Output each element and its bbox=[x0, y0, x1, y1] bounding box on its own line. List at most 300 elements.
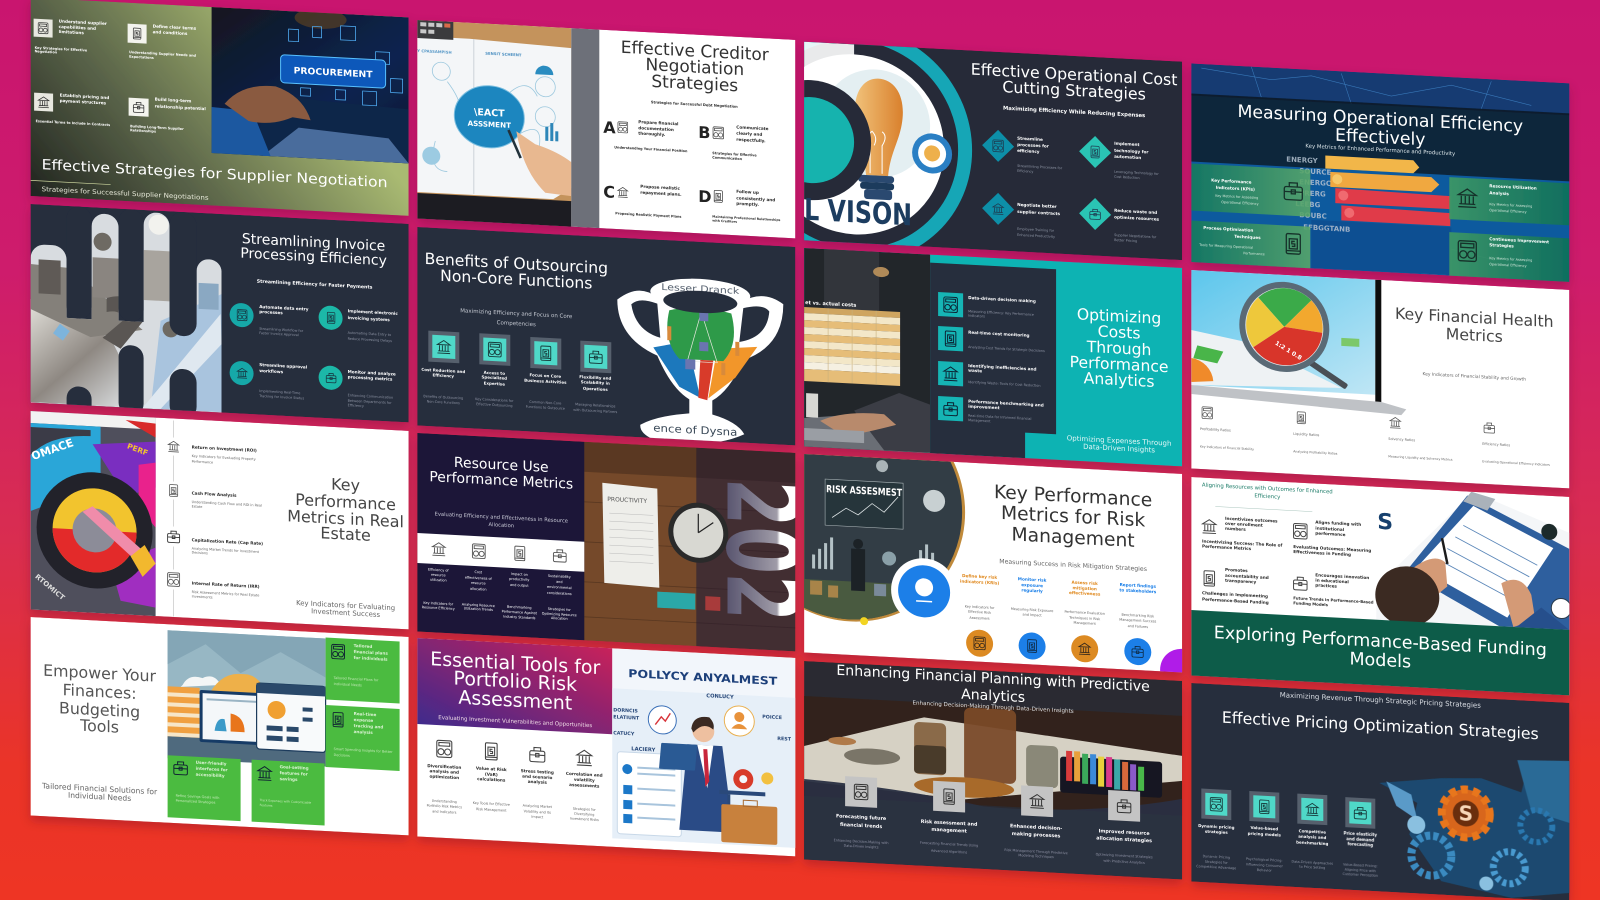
strategy: dynamic: strategies bbox=[1205, 829, 1228, 835]
photo: signing clipboard: S bbox=[1377, 510, 1393, 536]
strategy: dynamic: Competitive Advantage bbox=[1196, 864, 1236, 870]
column: define KRIs: Key Indicators for bbox=[965, 604, 995, 610]
subtitle: Strategies for Successful Debt Negotiation bbox=[651, 100, 738, 109]
risk assessment image bbox=[735, 385, 974, 633]
column: report findings bbox=[1119, 582, 1157, 666]
metric: ROI: Performance bbox=[192, 459, 213, 465]
title: Through bbox=[1086, 338, 1151, 359]
grey divider panel bbox=[571, 28, 599, 228]
strategy: competitive: Data-Driven Approaches bbox=[1292, 860, 1333, 866]
title: Essential Tools for bbox=[430, 648, 601, 679]
tool: correlation: Correlation and bbox=[566, 771, 603, 778]
use: forecasting bbox=[834, 776, 889, 850]
item: streamline: processes for bbox=[1017, 142, 1050, 149]
title: Performance Metrics bbox=[429, 469, 573, 493]
navy panel bbox=[417, 433, 584, 640]
panel: expense tracking: Real-time bbox=[354, 711, 376, 717]
item: streamline: Streamlining Processes for bbox=[1017, 164, 1063, 170]
tool: VaR bbox=[473, 742, 510, 813]
title: Models bbox=[1349, 649, 1411, 673]
slide background bbox=[804, 454, 1182, 672]
tool: stress testing: Impact bbox=[531, 815, 544, 819]
item: pricing structures: Establish pricing and bbox=[60, 93, 109, 100]
panel: continuous improvement: Key Metrics for Assessing bbox=[1489, 256, 1532, 262]
item: metrics: Efficiency bbox=[348, 403, 364, 408]
item: supplier capabilities: Negotiation bbox=[35, 49, 58, 55]
slide background bbox=[417, 638, 795, 856]
lead text: Efficiency bbox=[1254, 493, 1281, 501]
item B: respectfully. bbox=[736, 137, 766, 143]
tool: stress testing: analysis bbox=[528, 779, 547, 785]
use: allocation: allocation strategies bbox=[1096, 835, 1152, 844]
panel: process optimization: Performance bbox=[1243, 251, 1265, 256]
ratio: solvency bbox=[1388, 417, 1453, 462]
title: Effectively bbox=[1335, 126, 1426, 150]
metric: data driven: Indicators bbox=[968, 314, 985, 319]
gauge image: OMACE bbox=[29, 436, 75, 463]
metric: real-time bbox=[938, 326, 1045, 356]
strategy: elasticity: Value-Based Pricing: bbox=[1343, 862, 1378, 868]
metric: inefficiencies: Identifying Waste: Tools for Cost Reduction bbox=[968, 380, 1041, 388]
title: Key bbox=[331, 475, 360, 495]
column: sustainability bbox=[542, 549, 577, 621]
strategy: elasticity: and demand bbox=[1346, 836, 1374, 843]
strategy: elasticity: forecasting bbox=[1347, 841, 1373, 848]
metric: benchmarking: Performance benchmarking and bbox=[968, 399, 1044, 408]
photo: cost table at desk bbox=[804, 248, 930, 453]
item: e-invoicing: invoicing systems bbox=[348, 315, 390, 322]
title: Processing Efficiency bbox=[240, 246, 387, 269]
item: accountability: Performance-Based Funding bbox=[1202, 597, 1269, 605]
panel: financial plans: financial plans bbox=[354, 649, 388, 656]
item: clear terms: Understanding Supplier Needs and bbox=[129, 50, 197, 58]
slide background bbox=[804, 248, 1182, 466]
strategy: dynamic: Dynamic Pricing bbox=[1203, 854, 1230, 860]
chart arrows bbox=[1325, 156, 1450, 226]
panel: goal setting: features for bbox=[280, 770, 309, 777]
column: report findings: and Failures bbox=[1128, 624, 1148, 629]
panel: user-friendly: Personalized Strategies bbox=[176, 799, 216, 805]
item: contracts: Employee Training for bbox=[1017, 227, 1055, 233]
slide background bbox=[1191, 477, 1569, 695]
item: aligns funding: Aligns funding with bbox=[1315, 520, 1361, 527]
item: approvals: Tracking for Invoice Status bbox=[258, 394, 304, 400]
column: sustainability: and bbox=[556, 580, 562, 584]
title: Effective Operational Cost bbox=[971, 59, 1177, 89]
strategy: dynamic: Dynamic pricing bbox=[1198, 823, 1235, 830]
photo: impact assessment bbox=[416, 20, 571, 227]
title: Exploring Performance-Based Funding bbox=[1214, 623, 1547, 661]
column: cost effectiveness: resource bbox=[471, 581, 486, 586]
panel: KPIs: Indicators (KPIs) bbox=[1216, 185, 1255, 192]
lightbulb vision graphic: L VISON bbox=[804, 193, 912, 233]
tool: diversification: Diversification bbox=[427, 763, 461, 770]
slide: performance analytics bbox=[804, 248, 1182, 466]
panel: process optimization: Techniques bbox=[1234, 234, 1261, 240]
panel: goal setting: savings bbox=[280, 776, 298, 782]
column: assess mitigation bbox=[1064, 579, 1105, 663]
ratio: liquidity: Liquidity Ratios bbox=[1293, 432, 1320, 437]
panel: user-friendly: User-friendly bbox=[196, 760, 227, 766]
column: define KRIs: Define key risk bbox=[962, 573, 997, 580]
title: Enhancing Financial Planning with Predictive bbox=[836, 663, 1150, 695]
panel: resource utilization: Operational Efficiency bbox=[1489, 208, 1527, 214]
benefit: focus on core: Focus on Core bbox=[529, 372, 561, 379]
item: aligns funding: Effectiveness in Funding bbox=[1293, 549, 1351, 557]
subtitle: Strategies for Successful Supplier Negotiations bbox=[42, 185, 209, 202]
column: monitor exposure: Measuring Risk Exposure bbox=[1011, 607, 1053, 613]
tool: correlation: Diversifying bbox=[574, 812, 594, 817]
item A bbox=[603, 117, 688, 153]
illustration: policy analyst: CONLUCY bbox=[706, 693, 734, 701]
column: assess mitigation: Techniques in Risk bbox=[1068, 616, 1100, 621]
metric: benchmarking bbox=[938, 396, 1044, 426]
panel: expense tracking: analysis bbox=[354, 729, 373, 735]
metric: cap rate: Capitalization Rate (Cap Rate) bbox=[192, 537, 263, 546]
column: monitor exposure: Monitor risk bbox=[1018, 576, 1047, 583]
slide background bbox=[31, 411, 409, 629]
benefit: flexibility: with Outsourcing Partners bbox=[573, 408, 618, 414]
column: report findings: Management Success bbox=[1119, 618, 1157, 624]
risk assessment image: RISK ASSESMEST bbox=[826, 484, 902, 499]
tool: diversification: Understanding bbox=[432, 799, 457, 804]
slide: performance-based funding bbox=[1191, 477, 1571, 696]
illustration: policy analyst: LACIERY bbox=[631, 746, 656, 754]
item: innovation bbox=[1293, 571, 1374, 610]
tool: diversification bbox=[427, 740, 462, 815]
column: sustainability: Optimizing Resource bbox=[542, 612, 577, 617]
use: allocation: Improved resource bbox=[1099, 828, 1150, 837]
benefit: cost reduction: Efficiency bbox=[433, 372, 454, 379]
panel: expense tracking: tracking and bbox=[354, 723, 383, 730]
slide background bbox=[804, 42, 1182, 260]
strategy: dynamic: Strategies for bbox=[1205, 860, 1228, 865]
item: e-invoicing: Reduce Processing Delays bbox=[348, 337, 392, 343]
title: Assessment bbox=[458, 687, 572, 715]
item: e-invoicing: Automating Data Entry to bbox=[348, 331, 391, 337]
column: efficiency: Efficiency of bbox=[428, 568, 449, 573]
title: Performance bbox=[295, 490, 396, 514]
column: sustainability: Strategies for bbox=[548, 607, 571, 612]
item: pricing structures: Essential Terms to Include in Contracts bbox=[36, 119, 110, 127]
strategy: value-based: Behavior bbox=[1257, 868, 1272, 873]
column: assess mitigation: effectiveness bbox=[1069, 590, 1101, 597]
benefit: expertise: Access to bbox=[484, 370, 505, 376]
metric: inefficiencies: waste bbox=[968, 368, 982, 373]
title: Benefits of Outsourcing bbox=[425, 250, 608, 278]
item: supplier capabilities bbox=[34, 18, 107, 54]
item A: documentation bbox=[638, 125, 674, 132]
gauge image bbox=[29, 411, 156, 616]
item: aligns funding: institutional bbox=[1315, 526, 1345, 532]
subtitle: Enhancing Decision-Making Through Data-Driven Insights bbox=[912, 700, 1074, 715]
benefit: flexibility: Scalability in bbox=[581, 379, 610, 386]
column: report findings: Report findings bbox=[1120, 582, 1157, 589]
ratio: profitability bbox=[1200, 407, 1254, 451]
item: incentivizes: Performance Metrics bbox=[1202, 544, 1252, 551]
item: long-term relationships: Relationships bbox=[130, 128, 156, 134]
use: decisions: making processes bbox=[1012, 831, 1061, 840]
column: define KRIs: Assessment bbox=[969, 616, 990, 621]
subtitle: Measuring Success in Risk Mitigation Strategies bbox=[999, 558, 1147, 573]
title: Cutting Strategies bbox=[1002, 77, 1146, 104]
gauge image: RTOMICT bbox=[33, 573, 66, 602]
item: automate: Streamlining Workflow for bbox=[259, 327, 304, 333]
ratio: liquidity: Analyzing Profitability Ratios bbox=[1293, 449, 1338, 456]
item: supplier capabilities: Understand supplier bbox=[59, 18, 108, 26]
photo: signing clipboard bbox=[1375, 487, 1571, 635]
slide background bbox=[31, 617, 409, 835]
panel: expense tracking: Smart Spending Insights for Better bbox=[334, 747, 393, 754]
item: clear terms: Define clear terms bbox=[153, 24, 197, 31]
decorative purple corner circle bbox=[1160, 648, 1204, 694]
wood photo bbox=[417, 433, 820, 653]
title: Key Performance bbox=[994, 482, 1152, 511]
subtitle: Allocation bbox=[489, 522, 514, 529]
panel: financial plans: Tailored bbox=[354, 643, 372, 649]
ratio: solvency: Measuring Liquidity and Solvency Metrics bbox=[1388, 454, 1453, 462]
slide: outsourcing benefits bbox=[417, 227, 795, 451]
item: technology: automation bbox=[1114, 154, 1141, 160]
slide: financial health metrics bbox=[1191, 270, 1569, 488]
strategy: elasticity: Aligning Price with bbox=[1345, 868, 1376, 873]
panel: financial plans: for individuals bbox=[354, 655, 388, 662]
benefit: flexibility: Managing Relationships bbox=[575, 402, 616, 408]
metric: cap rate bbox=[166, 526, 263, 558]
item: metrics: Monitor and analyze bbox=[348, 369, 396, 377]
column: productivity: Impact on bbox=[511, 572, 528, 577]
tool: diversification: and Indicators bbox=[432, 809, 457, 815]
column: cost effectiveness: Cost bbox=[475, 570, 483, 574]
item: technology: technology for bbox=[1114, 148, 1149, 155]
panel: process optimization: Process Optimization bbox=[1203, 225, 1253, 233]
tool: VaR: calculations bbox=[477, 776, 506, 783]
title: Finances: bbox=[63, 680, 137, 703]
illustration: policy analyst: POICCE bbox=[762, 714, 782, 721]
column: define KRIs bbox=[960, 573, 999, 658]
item: automate: Automate data entry bbox=[259, 304, 309, 312]
column: monitor exposure: regularly bbox=[1021, 587, 1043, 594]
use: decisions bbox=[1004, 785, 1068, 860]
gear illustration: S bbox=[1459, 801, 1473, 826]
item: approvals bbox=[230, 360, 308, 401]
benefit: focus on core: Functions to Outsource bbox=[526, 405, 565, 411]
panel: expense tracking bbox=[326, 705, 400, 771]
item D: with Creditors bbox=[712, 219, 737, 224]
photo: gauge on laptop: 1:2 1 0.8 bbox=[1274, 340, 1303, 362]
tool: stress testing: Volatility and Its bbox=[524, 809, 551, 815]
metric: cap rate: Decisions bbox=[192, 550, 208, 555]
subtitle: Investment Success bbox=[311, 607, 380, 619]
item: contracts: Negotiate better bbox=[1017, 202, 1058, 209]
subtitle: Tailored Financial Solutions for bbox=[41, 781, 158, 796]
item: reduce waste: Supplier Negotiations for bbox=[1114, 233, 1157, 239]
item: innovation: practices bbox=[1315, 583, 1337, 589]
metric: real-time: Analyzing Cost Trends for Strategic Decisions bbox=[968, 345, 1045, 353]
tool: stress testing: Stress testing bbox=[521, 768, 554, 775]
column: sustainability: considerations bbox=[547, 591, 572, 596]
white icon band bbox=[417, 533, 584, 572]
panel: KPIs bbox=[1191, 164, 1310, 217]
slide: predictive analytics bbox=[804, 661, 1182, 879]
slide background bbox=[417, 20, 795, 238]
item: accountability: Promotes bbox=[1225, 567, 1248, 573]
illustration: policy analyst: CATUCY bbox=[613, 730, 635, 737]
column: assess mitigation: Performance Evaluation bbox=[1064, 610, 1105, 616]
column: sustainability: environmental bbox=[547, 585, 572, 590]
metric: benchmarking: improvement bbox=[968, 404, 1000, 410]
illustration: policy analyst: ELATIUNT bbox=[613, 714, 640, 722]
strategy: competitive: benchmarking bbox=[1296, 840, 1329, 846]
use: allocation bbox=[1096, 789, 1153, 865]
tool: diversification: analysis and bbox=[430, 768, 459, 775]
lead text bbox=[1202, 483, 1333, 513]
title: Streamlining Invoice bbox=[242, 231, 385, 255]
benefit: flexibility: Flexibility and bbox=[579, 374, 611, 381]
item: automate bbox=[230, 302, 309, 338]
strategy: competitive: to Price Setting bbox=[1299, 865, 1325, 870]
slide background bbox=[31, 204, 409, 422]
title: Analytics bbox=[961, 687, 1025, 706]
illustration: policy analyst: DORNCIS bbox=[613, 707, 638, 715]
item: aligns funding bbox=[1293, 518, 1371, 558]
panel: resource utilization: Key Metrics for Assessing bbox=[1489, 202, 1532, 208]
column: efficiency: Resource Efficiency bbox=[422, 605, 455, 611]
item B: B bbox=[698, 123, 710, 142]
ratio: efficiency bbox=[1482, 423, 1550, 467]
title: Non-Core Functions bbox=[440, 267, 592, 293]
panel: continuous improvement: Continuous Improvement bbox=[1489, 236, 1549, 244]
item C: Propose realistic bbox=[640, 184, 680, 191]
title: Metrics bbox=[1446, 324, 1503, 346]
subtitle: Data-Driven Insights bbox=[1083, 443, 1155, 455]
lightbulb vision graphic bbox=[804, 42, 972, 246]
item: pricing structures bbox=[34, 91, 110, 127]
word wall: BOUBC bbox=[1299, 211, 1327, 221]
item: accountability: transparency bbox=[1225, 578, 1257, 584]
item B: Strategies for Effective bbox=[712, 151, 757, 158]
lead text: Aligning Resources with Outcomes for Enhanced bbox=[1202, 483, 1333, 495]
column: cost effectiveness bbox=[462, 543, 495, 612]
panel: goal setting: Track Expenses with Customizable bbox=[259, 798, 311, 805]
strategy: dynamic bbox=[1196, 788, 1236, 870]
strategy: competitive: analysis and bbox=[1298, 834, 1327, 840]
column: assess mitigation: mitigation bbox=[1073, 585, 1097, 591]
title: Optimizing bbox=[1077, 305, 1161, 328]
use: forecasting: financial trends bbox=[840, 822, 882, 830]
item: approvals: workflows bbox=[259, 368, 284, 374]
photo: impact assessment: SENSIT SCHEENT bbox=[485, 51, 522, 58]
photo: impact assessment: ASSSMENT bbox=[468, 119, 511, 130]
item: incentivizes: numbers bbox=[1225, 526, 1246, 532]
tool: correlation: Strategies for bbox=[573, 807, 596, 812]
item: approvals: Implementing Real-Time bbox=[259, 389, 300, 395]
benefit: focus on core: Common Non-Core bbox=[529, 400, 561, 406]
item: incentivizes: Incentivizes outcomes bbox=[1225, 516, 1278, 524]
blue data backdrop bbox=[1191, 64, 1569, 282]
slide background bbox=[804, 661, 1182, 879]
photo: cost table at desk: et vs. actual costs bbox=[805, 300, 856, 309]
panel: user-friendly bbox=[168, 755, 241, 821]
title: Costs bbox=[1098, 322, 1141, 343]
tool: VaR: (VaR) bbox=[485, 772, 498, 777]
panel: user-friendly: Refine Savings Goals with bbox=[176, 794, 219, 800]
item: supplier capabilities: capabilities and bbox=[59, 24, 96, 31]
column: cost effectiveness: effectiveness of bbox=[465, 576, 493, 581]
use: risk: Forecasting Financial Trends Using bbox=[920, 841, 978, 848]
title: Metrics in Real bbox=[287, 506, 404, 531]
tool: VaR: Key Tools for Effective bbox=[473, 801, 510, 807]
ratio: liquidity bbox=[1293, 412, 1338, 456]
subtitle: Competencies bbox=[497, 320, 536, 328]
title: Management bbox=[1012, 524, 1135, 552]
item: reduce waste: Better Pricing bbox=[1114, 238, 1137, 243]
item: metrics bbox=[319, 365, 396, 410]
column: define KRIs: Effective Risk bbox=[968, 610, 991, 615]
column: report findings: to stakeholders bbox=[1119, 587, 1157, 594]
column: productivity: productivity bbox=[509, 577, 529, 582]
illustration: policy analyst: REST bbox=[777, 736, 792, 743]
panel: KPIs: Key Metrics for Assessing bbox=[1215, 194, 1258, 200]
slide background bbox=[1191, 270, 1569, 488]
item: contracts: supplier contracts bbox=[1017, 209, 1060, 216]
photo: gauge on laptop bbox=[1191, 270, 1406, 415]
subtitle: Evaluating Investment Vulnerabilities and Opportunities bbox=[438, 715, 592, 729]
item: metrics: processing metrics bbox=[348, 374, 393, 382]
title: Effective Pricing Optimization Strategies bbox=[1222, 708, 1539, 743]
benefit: expertise: Effective Outsourcing bbox=[476, 402, 513, 408]
item C: C bbox=[603, 182, 615, 202]
title: Effective Creditor bbox=[621, 38, 769, 66]
metric: benchmarking: Management bbox=[968, 418, 991, 423]
slide: real estate KPIs bbox=[29, 411, 409, 629]
item: reduce waste: Reduce waste and bbox=[1114, 208, 1157, 215]
item A: thoroughly. bbox=[638, 131, 666, 137]
use: risk: Risk assessment and bbox=[921, 819, 978, 828]
metric: cap rate: Analyzing Market Trends for Investment bbox=[192, 546, 260, 554]
panel: KPIs: Operational Efficiency bbox=[1221, 200, 1259, 206]
item B: Communication bbox=[712, 156, 743, 161]
item: technology bbox=[1079, 135, 1159, 181]
panel: resource utilization: Analysis bbox=[1489, 190, 1509, 196]
dark lower overlay bbox=[804, 779, 1182, 879]
illustration: policy analyst: POLLYCY ANYALMEST bbox=[628, 667, 778, 688]
wood photo: 202 bbox=[703, 476, 820, 624]
strategy: value-based: Psychological Pricing: bbox=[1246, 857, 1283, 863]
item: approvals: Streamline approval bbox=[259, 362, 308, 370]
item A: A bbox=[603, 118, 616, 137]
panel: continuous improvement: Strategies bbox=[1489, 242, 1514, 249]
panel: process optimization bbox=[1191, 220, 1310, 270]
column: define KRIs: indicators (KRIs) bbox=[960, 579, 999, 586]
use: forecasting: Data-Driven Insights bbox=[844, 844, 879, 850]
item: technology: Implement bbox=[1114, 141, 1139, 147]
word wall: ENERGY bbox=[1286, 156, 1319, 165]
benefit: focus on core: Business Activities bbox=[524, 378, 567, 385]
title: Performance bbox=[1070, 353, 1169, 376]
use: risk: Advanced Algorithms bbox=[931, 849, 967, 855]
use: forecasting: Forecasting future bbox=[836, 813, 887, 822]
slide background bbox=[31, 0, 409, 216]
word wall: SOURCE bbox=[1299, 167, 1331, 177]
strategy: elasticity: Price elasticity bbox=[1344, 830, 1377, 837]
slide: operational cost cutting bbox=[800, 42, 1186, 268]
panel: goal setting bbox=[252, 760, 325, 825]
column: sustainability: Allocation bbox=[551, 616, 568, 621]
use: decisions: Modeling Techniques bbox=[1018, 853, 1054, 859]
item: clear terms: Expectations bbox=[129, 55, 154, 60]
panel: financial plans: Individual Needs bbox=[334, 682, 362, 687]
